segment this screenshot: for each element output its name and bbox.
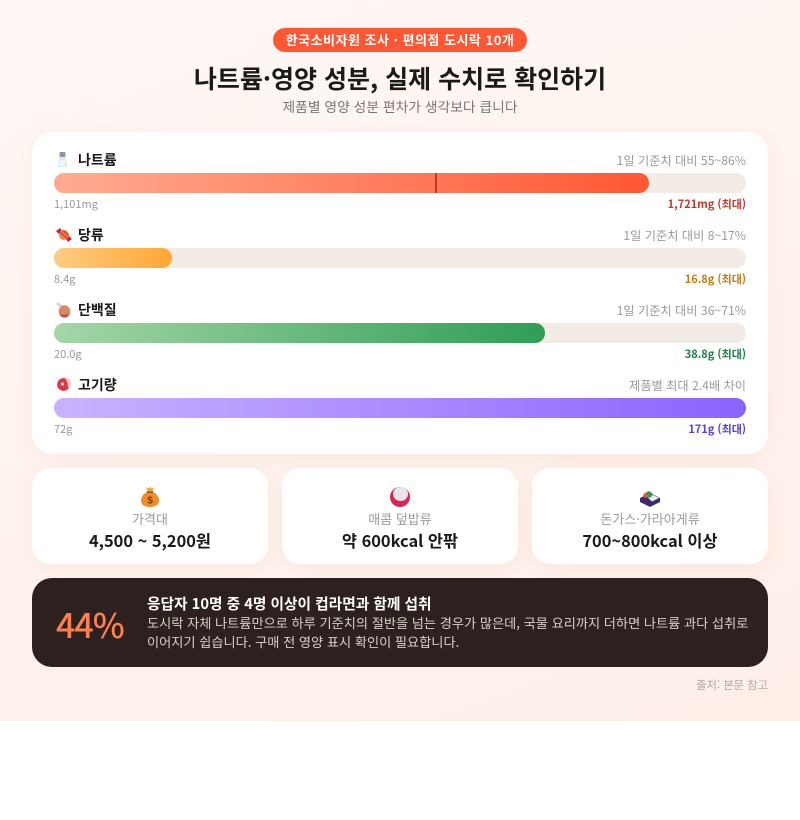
subtitle: 제품별 영양 성분 편차가 생각보다 큽니다 bbox=[282, 96, 518, 116]
note: sugar range: 1일 기준치 대비 8~17% bbox=[623, 226, 746, 244]
stat value: price: 4,500 ~ 5,200원 bbox=[89, 528, 211, 552]
callout body: 도시락 자체 나트륨만으로 하루 기준치의 절반을 넘는 경우가 많은데, 국물 요리까지 더하면 나트륨 과다 섭취로 bbox=[147, 613, 748, 632]
value: sodium max: 1,721mg (최대) bbox=[668, 196, 746, 212]
stat label: cutlet: 돈가스·가라아게류 bbox=[600, 509, 700, 528]
row: protein bbox=[54, 300, 746, 362]
stat card: price bbox=[32, 468, 268, 564]
label: sugar: 당류 bbox=[78, 225, 104, 245]
callout body bbox=[147, 613, 748, 650]
stat card: cutlet bbox=[532, 468, 768, 564]
badge: 한국소비자원 조사 · 편의점 도시락 10개 bbox=[286, 30, 514, 49]
value: meat max: 171g (최대) bbox=[688, 421, 746, 437]
row: sugar bbox=[54, 225, 746, 287]
note: sodium range: 1일 기준치 대비 55~86% bbox=[617, 151, 746, 169]
callout heading: 응답자 10명 중 4명 이상이 컵라면과 함께 섭취 bbox=[147, 593, 432, 614]
label: protein: 단백질 bbox=[78, 300, 117, 320]
value: meat min: 72g bbox=[54, 421, 72, 437]
callout body: 이어지기 쉽습니다. 구매 전 영양 표시 확인이 필요합니다. bbox=[147, 632, 459, 650]
icon: salt shaker bbox=[58, 152, 67, 167]
label: sodium: 나트륨 bbox=[78, 150, 117, 170]
source note: 출처: 본문 참고 bbox=[696, 677, 768, 693]
stat value: spicy rice bowl: 약 600kcal 안팎 bbox=[342, 528, 458, 552]
stat card: spicy rice bowl bbox=[282, 468, 518, 564]
bar: protein bbox=[54, 323, 746, 343]
row: meat bbox=[54, 375, 746, 437]
title: 나트륨·영양 성분, 실제 수치로 확인하기 bbox=[194, 60, 606, 96]
stat value: cutlet: 700~800kcal 이상 bbox=[582, 528, 718, 552]
icon: meat bbox=[57, 377, 71, 391]
row: sodium bbox=[54, 150, 746, 212]
bar: sugar bbox=[54, 248, 746, 268]
panel: nutrition bars bbox=[32, 132, 768, 454]
icon: rice bowl bbox=[390, 487, 410, 507]
label: meat: 고기량 bbox=[78, 375, 117, 395]
stat label: price: 가격대 bbox=[132, 509, 168, 528]
value: sugar max: 16.8g (최대) bbox=[685, 271, 746, 287]
note: meat range: 제품별 최대 2.4배 차이 bbox=[629, 376, 746, 394]
bar: sodium bbox=[54, 173, 746, 193]
value: sodium min: 1,101mg bbox=[54, 196, 98, 212]
stat label: spicy rice bowl: 매콤 덮밥류 bbox=[368, 509, 432, 528]
value: sugar min: 8.4g bbox=[54, 271, 75, 287]
bar: meat bbox=[54, 398, 746, 418]
icon: bento box bbox=[640, 491, 660, 507]
icon: money bag: $ bbox=[147, 496, 153, 506]
value: protein max: 38.8g (최대) bbox=[685, 346, 746, 362]
note: protein range: 1일 기준치 대비 36~71% bbox=[617, 301, 746, 319]
value: protein min: 20.0g bbox=[54, 346, 82, 362]
icon: drumstick bbox=[56, 302, 70, 318]
callout bbox=[32, 578, 768, 667]
icon: money bag bbox=[141, 487, 159, 507]
callout figure: 44% bbox=[56, 599, 124, 648]
icon: candy bbox=[56, 228, 72, 242]
